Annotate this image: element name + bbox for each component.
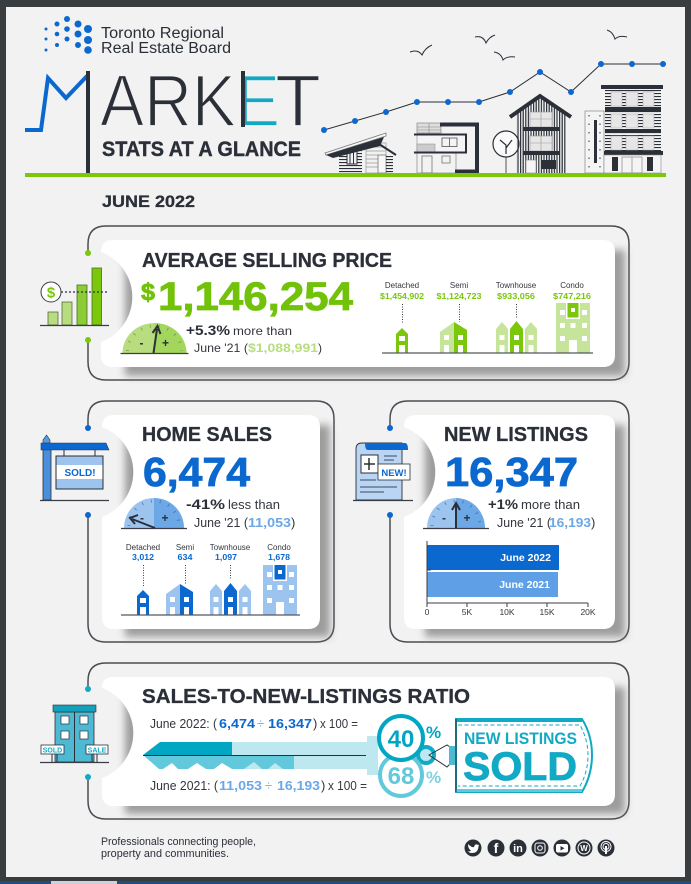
icon: rising bars with dollar: $ xyxy=(47,284,56,302)
footer tagline xyxy=(101,836,256,860)
formula 2022 xyxy=(150,716,358,731)
card xyxy=(404,415,615,629)
townhouse: Townhouse xyxy=(210,543,251,552)
bar: june 2022: June 2022 xyxy=(500,552,551,564)
semi: Semi xyxy=(176,543,194,552)
logo wordmark: Toronto Regional xyxy=(101,25,224,42)
big number: 16,347 xyxy=(445,449,578,495)
semi: Semi xyxy=(450,281,468,290)
panel frame xyxy=(85,401,334,642)
change text xyxy=(186,322,322,355)
tree xyxy=(493,131,519,173)
gauge: - xyxy=(442,511,446,525)
formula 2021: ) xyxy=(321,778,325,793)
logo xyxy=(44,16,231,57)
formula 2021 xyxy=(150,778,367,793)
condo: Condo xyxy=(560,281,584,290)
card shadow xyxy=(125,425,330,637)
icon: facebook: f xyxy=(494,840,499,856)
tag: new listings sold: SOLD xyxy=(463,745,577,789)
change text: June '21 ( xyxy=(194,515,249,530)
title letters: E xyxy=(236,61,280,142)
icon: linkedin xyxy=(510,840,526,856)
townhouse: $933,056 xyxy=(497,291,535,301)
trend line xyxy=(321,61,666,133)
icon: apartment building with signs: SOLD xyxy=(43,748,62,754)
condo: 1,678 xyxy=(268,552,290,562)
condo xyxy=(553,281,591,353)
change text: 16,193 xyxy=(549,515,591,530)
big price: $ xyxy=(141,279,156,306)
icon: podcast xyxy=(598,840,614,856)
heading: SALES-TO-NEW-LISTINGS RATIO xyxy=(142,686,470,708)
icon: instagram xyxy=(532,840,548,856)
townhouse xyxy=(496,281,537,353)
semi xyxy=(166,543,194,615)
heading: NEW LISTINGS xyxy=(444,424,588,446)
gauge xyxy=(121,498,187,528)
heading: AVERAGE SELLING PRICE xyxy=(142,250,392,272)
change text xyxy=(488,496,595,530)
icon: linkedin: in xyxy=(513,843,523,855)
card xyxy=(102,677,615,806)
date: JUNE 2022 xyxy=(102,192,195,211)
townhouse xyxy=(210,543,251,615)
detached: $1,454,902 xyxy=(380,291,424,301)
axis: 15K xyxy=(539,607,555,617)
ratio circles: 68 xyxy=(388,763,414,790)
detached: Detached xyxy=(126,543,160,552)
condo: $747,216 xyxy=(553,291,591,301)
formula 2021: June 2021: ( xyxy=(150,778,219,793)
townhouse: 1,097 xyxy=(215,552,237,562)
change text: $1,088,991 xyxy=(248,341,318,355)
logo wordmark xyxy=(101,25,231,57)
card shadow xyxy=(425,425,625,637)
formula 2022: x 100 = xyxy=(320,716,358,731)
title letter M as line chart xyxy=(25,71,90,176)
logo wordmark: Real Estate Board xyxy=(101,40,231,57)
home type sales xyxy=(121,543,300,615)
change text: June '21 ( xyxy=(194,341,248,355)
apartment tower xyxy=(585,85,663,173)
home type prices xyxy=(380,281,593,353)
icon: sold sign: SOLD! xyxy=(64,468,96,479)
ratio circles: 40 xyxy=(388,726,414,753)
gauge: - xyxy=(140,511,144,525)
key graphic xyxy=(143,736,378,775)
title letters xyxy=(100,61,321,142)
detached: Detached xyxy=(385,281,419,290)
change text xyxy=(186,496,295,530)
title: market xyxy=(25,61,321,176)
icon: wordpress xyxy=(576,840,592,856)
card shadow xyxy=(125,250,625,376)
panel frame xyxy=(85,226,629,380)
townhouse: Townhouse xyxy=(496,281,537,290)
formula 2022: ÷ xyxy=(257,716,264,731)
ratio circles: % xyxy=(426,723,441,742)
change text: more than xyxy=(521,497,580,512)
detached xyxy=(380,281,424,353)
logo dots xyxy=(44,16,92,54)
title letters: T xyxy=(275,61,321,142)
panel: new listings xyxy=(353,401,629,642)
bar: june 2022 xyxy=(427,545,559,570)
gauge: + xyxy=(162,336,169,350)
condo xyxy=(263,543,297,615)
green ground line xyxy=(25,173,666,177)
tag: new listings sold xyxy=(429,719,592,792)
big number: 6,474 xyxy=(143,449,250,495)
axis: 5K xyxy=(462,607,473,617)
gauge: - xyxy=(140,336,144,350)
change text: less than xyxy=(228,497,280,512)
icon: new listing document xyxy=(353,443,413,500)
title letters: ARK xyxy=(100,61,236,142)
subtitle: STATS AT A GLANCE xyxy=(102,138,301,161)
formula 2022: 16,347 xyxy=(268,716,312,731)
card xyxy=(101,240,615,367)
icon: facebook xyxy=(488,840,504,856)
icon: twitter xyxy=(464,840,482,856)
ratio circles: % xyxy=(426,768,441,787)
gauge: + xyxy=(463,511,471,525)
gauge xyxy=(120,323,188,354)
change text: ) xyxy=(591,515,595,530)
formula 2022: June 2022: ( xyxy=(150,716,218,731)
axis xyxy=(425,541,596,617)
change text: June '21 ( xyxy=(497,515,552,530)
panel: sales-to-new-listings ratio xyxy=(40,663,629,819)
panel: average selling price xyxy=(40,226,629,380)
formula 2022: 6,474 xyxy=(219,716,256,731)
card xyxy=(102,415,320,629)
icon: apartment building with signs: SALE xyxy=(88,748,107,754)
icon: youtube xyxy=(554,840,570,856)
condo: Condo xyxy=(267,543,291,552)
change text: more than xyxy=(233,324,292,338)
social media icons xyxy=(464,840,614,856)
taskbar strip xyxy=(0,881,691,884)
panel frame xyxy=(85,663,629,819)
change text: 11,053 xyxy=(248,515,291,530)
gauge xyxy=(423,498,489,528)
axis: 20K xyxy=(580,607,596,617)
formula 2021: 16,193 xyxy=(277,778,320,793)
tag: new listings sold: NEW LISTINGS xyxy=(464,729,577,748)
icon: new listing document: NEW! xyxy=(381,468,407,479)
change text: -41% xyxy=(186,496,226,512)
icon: apartment building with signs xyxy=(40,705,109,762)
detached: 3,012 xyxy=(132,552,154,562)
axis: 10K xyxy=(499,607,515,617)
icon: sold sign xyxy=(40,435,109,500)
formula 2022: ) xyxy=(313,716,317,731)
change text: ) xyxy=(291,515,295,530)
panel frame xyxy=(387,401,629,642)
birds xyxy=(410,30,627,60)
formula 2021: ÷ xyxy=(265,778,272,793)
footer tagline: Professionals connecting people, xyxy=(101,836,256,848)
axis: 0 xyxy=(425,607,430,617)
house 1 xyxy=(325,133,396,173)
house 3 xyxy=(510,96,571,173)
footer tagline: property and communities. xyxy=(101,848,229,860)
bar: june 2021: June 2021 xyxy=(499,579,550,591)
semi xyxy=(436,281,482,353)
formula 2021: x 100 = xyxy=(328,778,367,793)
change text: +5.3% xyxy=(186,322,231,338)
bar: june 2021 xyxy=(427,572,558,597)
icon: rising bars with dollar xyxy=(40,268,109,326)
heading: HOME SALES xyxy=(142,424,272,446)
ratio circles xyxy=(379,716,441,796)
detached xyxy=(126,543,160,615)
formula 2021: 11,053 xyxy=(219,778,262,793)
gauge: + xyxy=(161,511,169,525)
icon: wordpress: W xyxy=(580,844,588,853)
panel: home sales xyxy=(40,401,334,642)
change text: ) xyxy=(318,341,322,355)
semi: 634 xyxy=(178,552,193,562)
house 2 xyxy=(414,123,477,173)
skyline illustration xyxy=(320,30,666,177)
card shadow xyxy=(125,687,625,814)
bar chart xyxy=(425,541,596,617)
big price: 1,146,254 xyxy=(158,275,354,319)
semi: $1,124,723 xyxy=(436,291,482,301)
change text: +1% xyxy=(488,496,519,512)
